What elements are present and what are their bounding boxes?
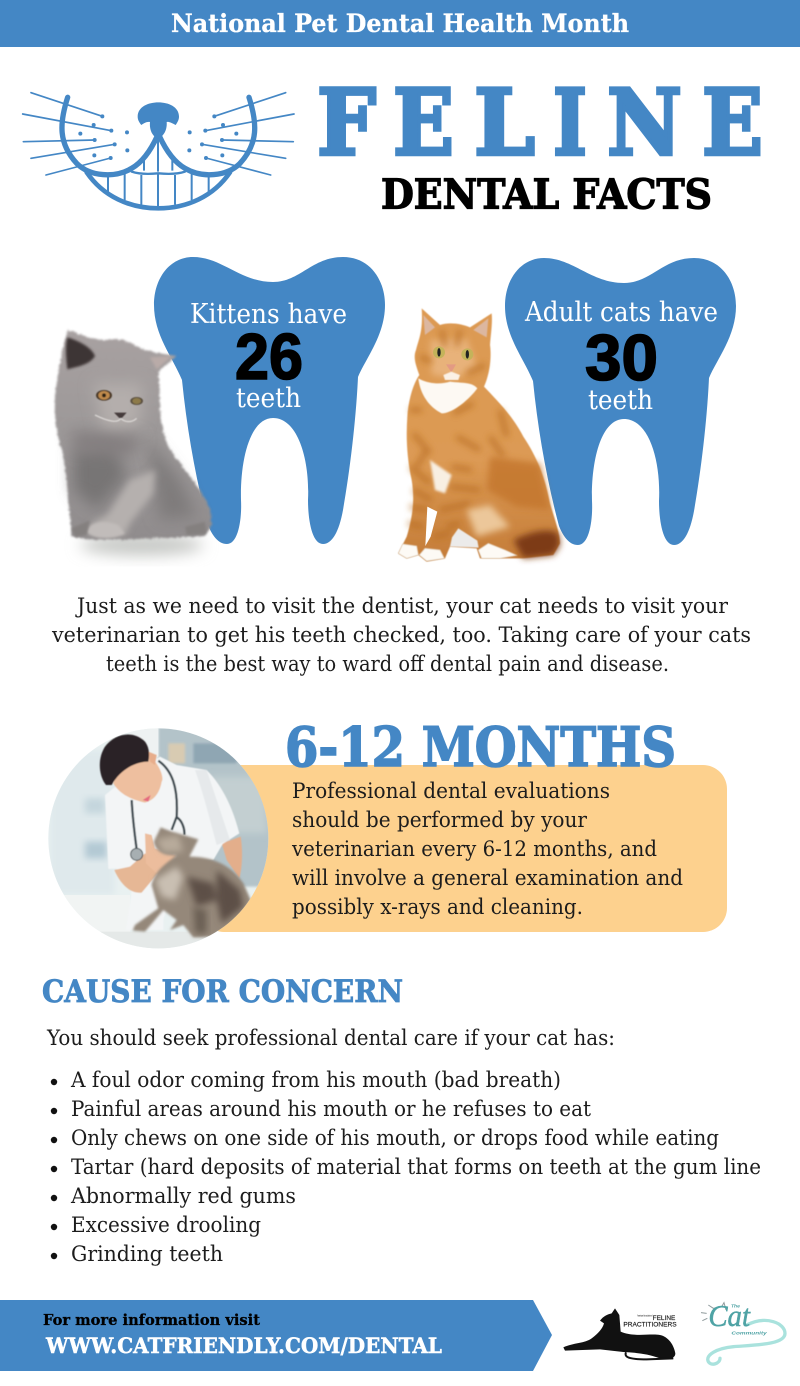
bullet list: Tartar (hard deposits of material that forms on teeth at the gum line: [71, 1155, 761, 1180]
heading: FELINE: N: [607, 70, 682, 176]
bullet list: Only chews on one side of his mouth, or drops food while eating: [71, 1126, 719, 1151]
callout: 6-12 months box: should be performed by your: [292, 808, 588, 833]
logo: the cat community: The: [731, 1303, 740, 1309]
tooth: adult cats: [505, 258, 736, 545]
tooth: kittens: 26: [235, 320, 303, 393]
heading: FELINE: I: [553, 70, 587, 176]
footer arrow banner: WWW.CATFRIENDLY.COM/DENTAL: [45, 1334, 442, 1359]
logo: the cat community: [701, 1299, 785, 1364]
heading: FELINE: L: [474, 70, 535, 176]
callout: 6-12 months box: [200, 715, 727, 932]
bullet list: [51, 1068, 761, 1267]
footer arrow banner: For more information visit: [43, 1311, 260, 1329]
logo: the cat community: Cat: [708, 1299, 751, 1333]
logo: feline practitioners: American Association of: [637, 1314, 652, 1318]
heading: FELINE: E: [702, 70, 763, 176]
callout: 6-12 months box: 6-12 MONTHS: [285, 715, 676, 779]
logo: feline practitioners: FELINE: [653, 1315, 676, 1322]
photo: vet examining cat: [47, 727, 270, 952]
bullet list: Painful areas around his mouth or he refuses to eat: [71, 1097, 591, 1122]
logo: feline practitioners: [563, 1308, 677, 1359]
logo: the cat community: Community: [731, 1331, 767, 1337]
icon: cat smile logo: [23, 93, 294, 208]
top banner: [0, 0, 800, 47]
heading: dental facts: DENTAL FACTS: [381, 170, 712, 218]
callout: 6-12 months box: possibly x-rays and cleaning.: [292, 895, 583, 920]
heading: cause for concern: CAUSE FOR CONCERN: [42, 974, 403, 1010]
footer arrow banner: [0, 1300, 552, 1371]
tooth: adult cats: 30: [585, 321, 658, 394]
tooth: adult cats: teeth: [588, 385, 653, 416]
logo: feline practitioners: PRACTITIONERS: [623, 1322, 677, 1329]
heading: FELINE: E: [393, 70, 454, 176]
bullet list: Abnormally red gums: [70, 1184, 296, 1209]
tooth: kittens: [154, 257, 385, 544]
intro paragraph: veterinarian to get his teeth checked, too. Taking care of your cats: [51, 623, 751, 648]
photo: grey kitten: [55, 330, 212, 556]
heading: FELINE: [317, 70, 763, 176]
heading: FELINE: F: [317, 70, 376, 176]
bullet list: A foul odor coming from his mouth (bad breath): [70, 1068, 561, 1093]
intro paragraph: [51, 594, 751, 677]
bullet list: Excessive drooling: [71, 1213, 261, 1238]
tooth: kittens: Kittens have: [190, 299, 347, 330]
top banner: National Pet Dental Health Month: [171, 9, 629, 38]
intro paragraph: Just as we need to visit the dentist, your cat needs to visit your: [75, 594, 729, 619]
callout: 6-12 months box: veterinarian every 6-12 months, and: [291, 837, 657, 862]
bullet list: Grinding teeth: [71, 1242, 223, 1267]
text: lead-in sentence: You should seek professional dental care if your cat has:: [46, 1026, 615, 1051]
tooth: adult cats: Adult cats have: [524, 297, 718, 328]
photo: orange cat: [398, 308, 560, 562]
callout: 6-12 months box: Professional dental evaluations: [292, 779, 610, 804]
callout: 6-12 months box: will involve a general examination and: [292, 866, 683, 891]
intro paragraph: teeth is the best way to ward off dental pain and disease.: [106, 652, 669, 677]
tooth: kittens: teeth: [236, 383, 301, 414]
